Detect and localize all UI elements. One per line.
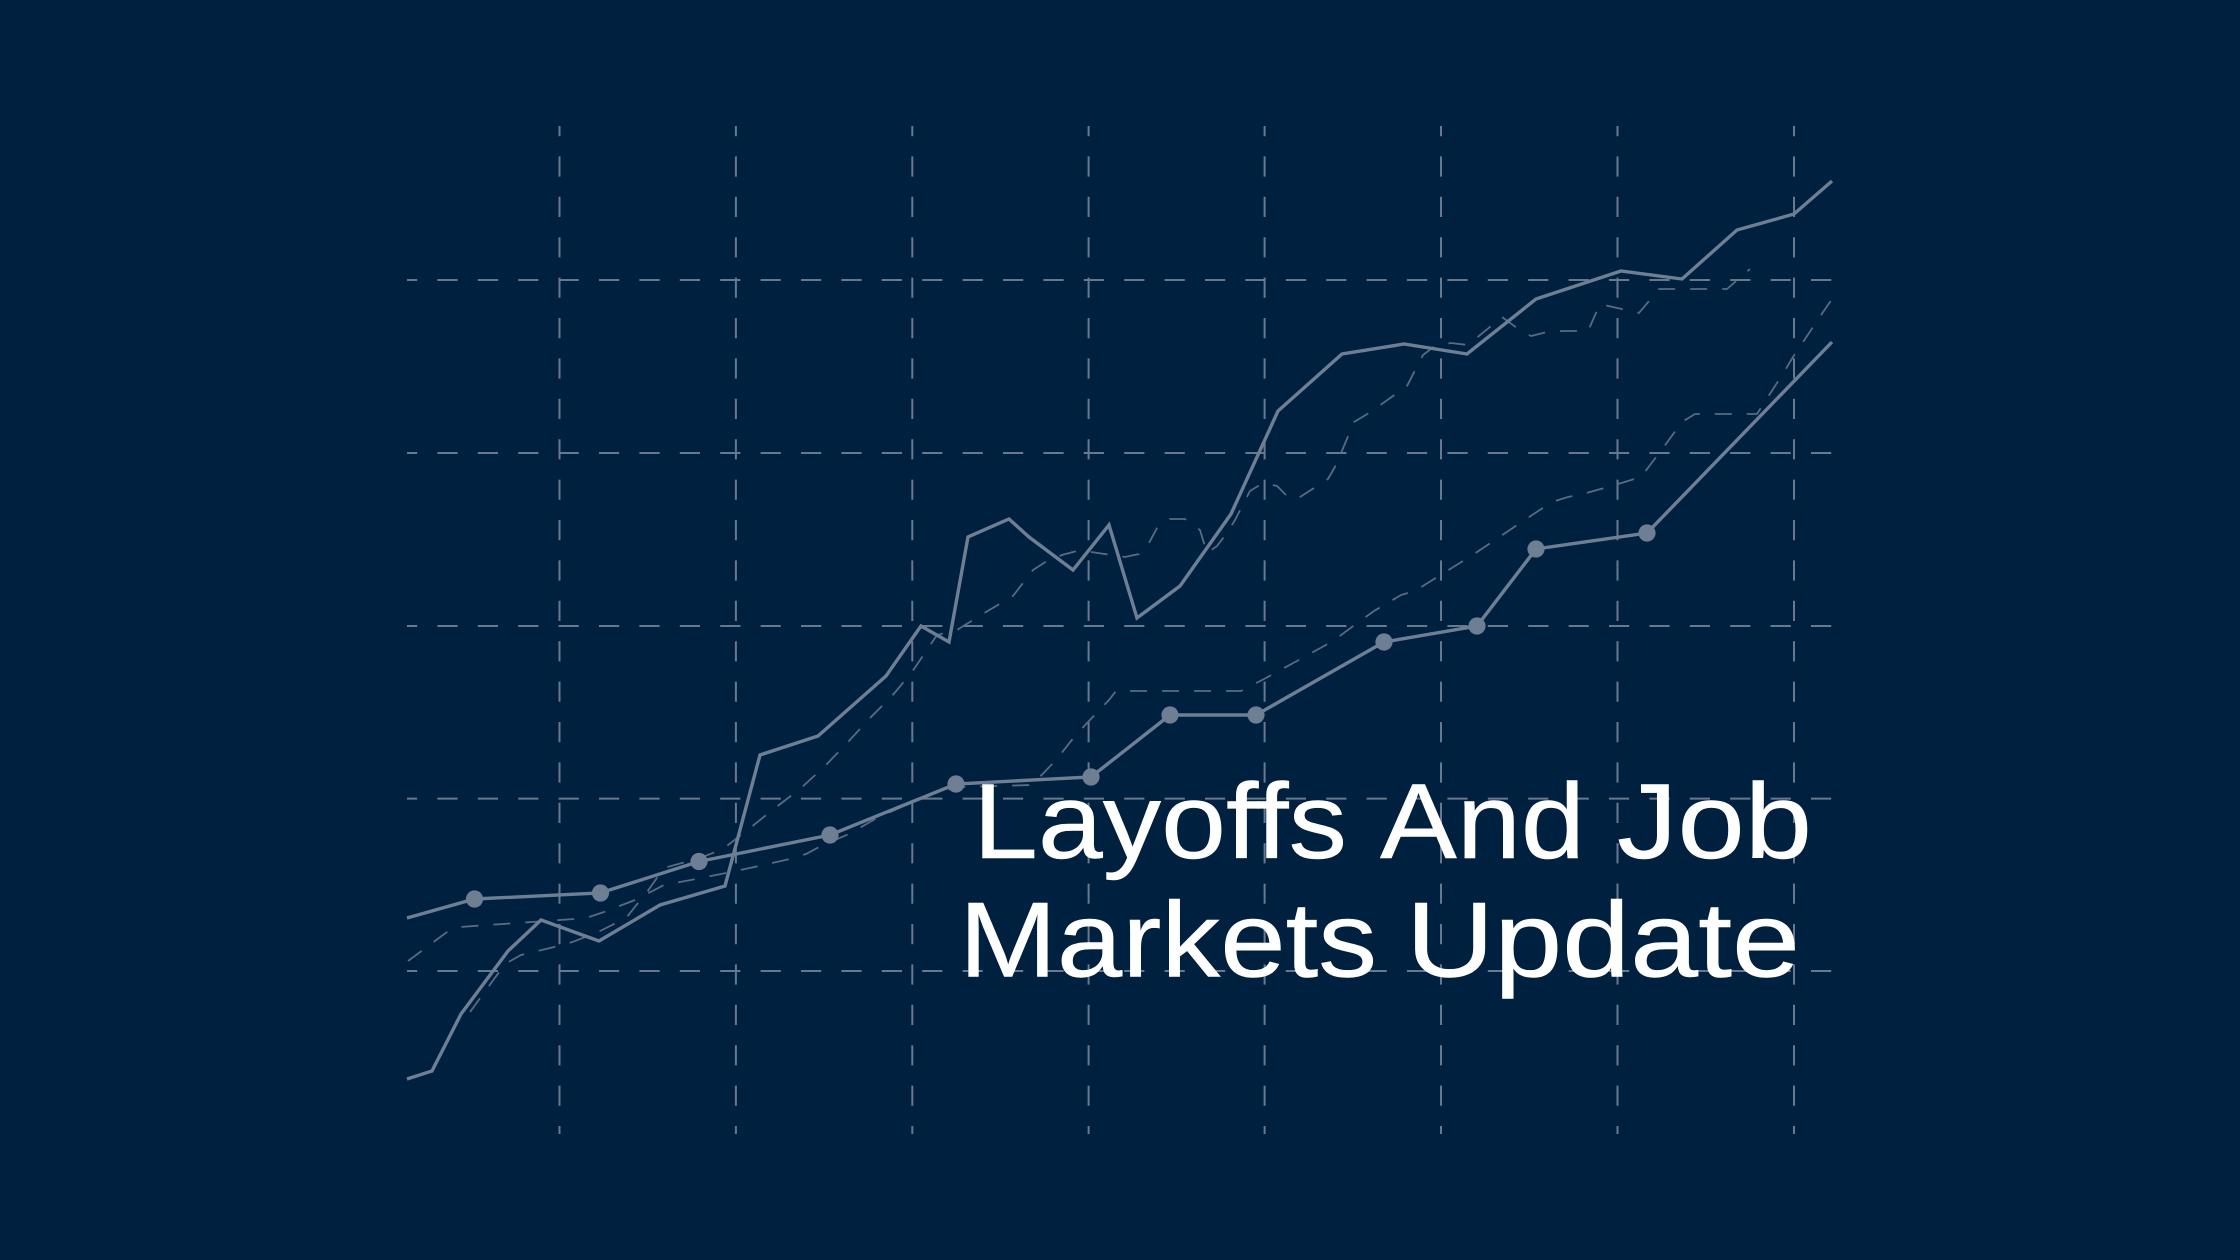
title [959,761,1812,1000]
title: Update [1406,880,1800,1000]
title: And [1380,761,1585,881]
title: Layoffs [973,761,1347,881]
dashed line: upper series [470,269,1750,1012]
title: Job [1617,761,1812,881]
solid line: upper series [407,181,1832,1079]
title: Markets [959,880,1377,1000]
dashed line: lower series [408,299,1832,961]
solid line with markers: lower series [407,342,1832,918]
